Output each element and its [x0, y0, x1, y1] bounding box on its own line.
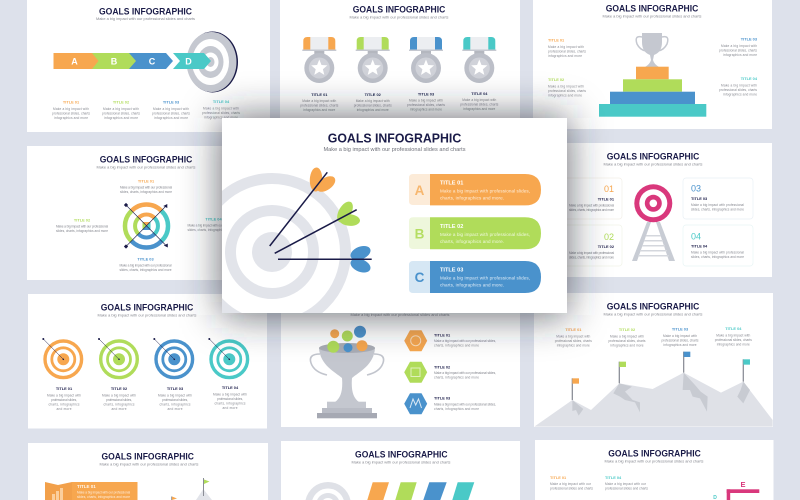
slide subtitle: Make a big impact with our professional slides and charts: [602, 14, 702, 18]
pill C: TITLE 03: [440, 268, 463, 274]
flags on peak: [172, 478, 212, 500]
left text blocks: TITLE 01: [548, 38, 565, 42]
flag text blocks: TITLE 04: [725, 326, 742, 331]
hexagon text blocks: TITLE 01: [434, 332, 451, 338]
heading: GOALS INFOGRAPHIC: [328, 131, 461, 145]
target captions: charts, infographics: [104, 402, 135, 406]
column text blocks: TITLE 01: [63, 100, 80, 104]
medal captions: TITLE 03: [418, 92, 435, 96]
target captions: charts, infographics: [160, 402, 191, 406]
card 04: Make a big impact with professional: [691, 250, 744, 254]
right text blocks: professional slides, charts: [719, 48, 757, 52]
left text blocks: Make a big impact with: [548, 45, 584, 49]
target captions: professional slides,: [51, 398, 77, 402]
flag text blocks: infographics and more: [664, 343, 697, 347]
medal captions: infographics and more: [410, 108, 442, 112]
flag text blocks: Make a big impact with: [556, 334, 591, 338]
column text blocks: [52, 99, 240, 120]
medal captions: TITLE 02: [365, 92, 382, 97]
icon: ladder: [632, 222, 675, 261]
text blocks: TITLE 02: [74, 218, 91, 222]
text block: title 04: Make a big impact with our: [605, 482, 647, 486]
subheading: Make a big impact with our professional slides and charts: [324, 147, 466, 153]
slide title: GOALS INFOGRAPHIC: [101, 302, 193, 314]
arrow ribbon A B C D: D: [185, 56, 192, 66]
medal captions: TITLE 04: [471, 91, 488, 96]
slanted colour bars: [367, 482, 474, 500]
orange banner: slides, charts, infographics and more: [77, 495, 130, 499]
text block: title 01: [550, 475, 593, 490]
pill B: [409, 217, 541, 249]
panel: target and slanted bars slide: [281, 441, 520, 500]
pill C: C: [415, 270, 425, 285]
panel: arrow ribbon and target slide: [27, 0, 270, 132]
slide title: GOALS INFOGRAPHIC: [608, 448, 701, 460]
card 04: 04: [691, 232, 701, 242]
panel: trophy with balls slide: [281, 300, 520, 427]
hexagon text blocks: charts, infographics and more: [434, 376, 479, 380]
column text blocks: professional slides, charts: [102, 112, 140, 116]
card 02: [545, 225, 622, 266]
panel: banner and flag slide: [28, 443, 268, 500]
panel: main goals card: [222, 118, 567, 313]
medal captions: professional slides, charts: [407, 103, 445, 107]
flag text blocks: Make a big impact with: [663, 334, 697, 338]
left text blocks: infographics and more: [548, 54, 582, 58]
pill C: [409, 261, 541, 293]
icon: pink target: [634, 184, 672, 222]
column text blocks: infographics and more: [54, 116, 88, 120]
right text blocks: Make a big impact with: [721, 84, 757, 88]
medal captions: professional slides, charts: [354, 104, 392, 108]
icon: green target: [98, 338, 137, 378]
text block: title 01: Make a big impact with our: [550, 482, 592, 486]
medal 1: [302, 37, 336, 83]
pill A: TITLE 01: [440, 180, 463, 186]
flag text blocks: infographics and more: [717, 342, 750, 346]
orange banner: [45, 482, 138, 500]
target captions: professional slides,: [162, 398, 188, 402]
hexagon text blocks: TITLE 03: [434, 396, 451, 400]
panel: trophy pyramid slide: [533, 0, 772, 129]
slide title: GOALS INFOGRAPHIC: [607, 152, 699, 162]
column text blocks: professional slides, charts: [52, 112, 90, 116]
medal captions: Make a big impact with: [462, 98, 497, 102]
text blocks: Make a big impact with our professional: [120, 186, 172, 190]
arrow ribbon A B C D: C: [149, 56, 156, 66]
text block: title 04: professional slides and charts: [605, 486, 648, 490]
arrow ribbon A B C D: B: [111, 56, 118, 66]
target captions: and more: [56, 407, 72, 411]
target captions: and more: [112, 407, 127, 411]
arrow ribbon A B C D: [54, 53, 211, 69]
left text blocks: Make a big impact with: [548, 84, 584, 88]
medal captions: TITLE 01: [311, 92, 328, 97]
column text blocks: TITLE 02: [113, 100, 130, 104]
card 02: slides, charts, infographics and more: [569, 256, 614, 260]
card 03: 03: [691, 184, 701, 194]
hexagon text blocks: Make a big impact with our professional slides,: [434, 339, 496, 343]
flag text blocks: TITLE 02: [619, 327, 636, 332]
text blocks: slides, charts, infographics and more: [120, 268, 172, 272]
slide subtitle: Make a big impact with our professional slides and charts: [604, 460, 704, 464]
medal captions: Make a big impact with: [409, 98, 443, 102]
slide title: GOALS INFOGRAPHIC: [99, 6, 192, 17]
icon: large trophy: [310, 343, 384, 418]
slide subtitle: Make a big impact with our professional slides and charts: [98, 314, 197, 318]
balls in trophy: [327, 326, 368, 353]
icon: blue target: [153, 338, 193, 378]
medal captions: infographics and more: [303, 108, 336, 112]
text blocks: TITLE 01: [138, 178, 155, 184]
text blocks: Make a big impact with our professional: [56, 224, 108, 228]
card 02: TITLE 02: [598, 244, 615, 249]
text block: title 04: [605, 475, 648, 490]
flag text blocks: infographics and more: [610, 344, 644, 348]
medal captions: [300, 91, 499, 112]
slide title: GOALS INFOGRAPHIC: [100, 154, 192, 166]
flag text blocks: professional slides, charts: [555, 339, 592, 343]
slide title: GOALS INFOGRAPHIC: [355, 450, 448, 460]
pill A: A: [415, 183, 425, 198]
hexagon text blocks: charts, infographics and more: [434, 407, 479, 411]
crossed arrows: [124, 203, 168, 248]
flag text blocks: [555, 326, 752, 348]
medal 2: [356, 37, 390, 83]
medal captions: infographics and more: [357, 108, 389, 112]
panel: four targets slide: [28, 294, 267, 428]
stair letters: E: [740, 480, 746, 489]
arrow: orange: [270, 167, 338, 246]
left text blocks: professional slides, charts: [548, 89, 586, 93]
icon: target with shadow edge: [186, 32, 238, 92]
icon: teal target: [208, 338, 248, 378]
pill A: [409, 174, 541, 205]
medal 3: [409, 37, 443, 83]
flag text blocks: TITLE 03: [672, 326, 689, 332]
icon: large target: [222, 173, 351, 313]
right text blocks: [719, 36, 758, 96]
medal captions: Make a big impact with: [302, 99, 337, 103]
slide title: GOALS INFOGRAPHIC: [101, 452, 194, 462]
right text blocks: infographics and more: [723, 53, 757, 57]
orange banner: TITLE 01: [77, 484, 96, 489]
target captions: Make a big impact with: [47, 394, 81, 398]
text blocks: TITLE 04: [205, 216, 222, 222]
target captions: [47, 385, 247, 411]
slide subtitle: Make a big impact with our professional slides and charts: [604, 312, 703, 316]
slide subtitle: Make a big impact with our professional slides and charts: [100, 462, 199, 466]
medal captions: professional slides, charts: [460, 102, 499, 106]
flag text blocks: Make a big impact with: [610, 334, 644, 338]
column text blocks: infographics and more: [154, 116, 188, 120]
arrow: blue: [278, 243, 373, 275]
right text blocks: infographics and more: [723, 92, 757, 96]
column text blocks: TITLE 03: [163, 100, 180, 104]
left text blocks: professional slides, charts: [548, 50, 586, 54]
card 01: TITLE 01: [598, 196, 615, 202]
target captions: professional slides,: [106, 398, 132, 402]
mountains and flags: [534, 352, 773, 427]
icon: blue hexagon: [404, 393, 427, 414]
column text blocks: professional slides, charts: [152, 112, 190, 116]
column text blocks: infographics and more: [104, 116, 138, 120]
pyramid steps: [599, 67, 706, 117]
text blocks: slides, charts, infographics and more: [188, 228, 240, 232]
stair letters: [713, 480, 759, 500]
panel: crossed arrows target slide: [27, 146, 267, 280]
card 04: slides, charts, infographics and more: [691, 255, 744, 259]
target captions: Make a big impact with: [158, 394, 192, 398]
hexagon text blocks: [434, 332, 496, 411]
arrow: green: [275, 199, 360, 253]
medal captions: professional slides, charts: [300, 104, 339, 108]
flag text blocks: Make a big impact with: [716, 334, 751, 338]
text block: title 01: professional slides and charts: [550, 486, 593, 490]
target captions: Make a big impact with: [213, 392, 247, 396]
target captions: and more: [222, 406, 238, 410]
text block: title 01: TITLE 01: [550, 475, 567, 480]
pill A: charts, infographics and more.: [440, 196, 504, 200]
target captions: TITLE 03: [167, 386, 184, 391]
slide subtitle: Make a big impact with our professional slides and charts: [604, 162, 703, 166]
target captions: Make a big impact with: [102, 394, 136, 398]
hexagon text blocks: Make a big impact with our professional slides,: [434, 371, 496, 375]
orange banner: Make a big impact with our professional: [77, 490, 130, 494]
centre card shadow: [222, 118, 567, 315]
card 01: Make a big impact with professional: [569, 204, 614, 208]
column text blocks: infographics and more: [204, 116, 238, 120]
flag text blocks: professional slides, charts: [662, 338, 699, 342]
icon: green hexagon: [404, 362, 427, 383]
slide subtitle: Make a big impact with our professional slides and charts: [350, 313, 450, 317]
icon: orange hexagon: [404, 330, 427, 351]
flag text blocks: infographics and more: [557, 344, 590, 348]
card 04: TITLE 04: [691, 244, 708, 248]
text blocks: slides, charts, infographics and more: [120, 190, 172, 194]
card 03: slides, charts, infographics and more: [691, 208, 744, 212]
slide subtitle: Make a big impact with our professional slides and charts: [96, 17, 195, 21]
text blocks: Make a big impact with our professional: [188, 224, 240, 228]
card 03: Make a big impact with professional: [691, 203, 744, 207]
hexagon text blocks: charts, infographics and more: [434, 344, 479, 348]
column text blocks: professional slides, charts: [202, 111, 240, 115]
column text blocks: Make a big impact with: [53, 107, 89, 111]
hexagon text blocks: Make a big impact with our professional slides,: [434, 402, 496, 406]
target captions: TITLE 01: [56, 386, 73, 391]
slide subtitle: Make a big impact with our professional slides and charts: [350, 16, 449, 20]
right text blocks: TITLE 03: [741, 36, 758, 42]
icon: four colour target: [125, 204, 168, 248]
flag text blocks: professional slides, charts: [608, 339, 646, 343]
slide subtitle: Make a big impact with our professional slides and charts: [96, 165, 196, 169]
target captions: and more: [168, 407, 183, 411]
target captions: TITLE 04: [222, 385, 239, 390]
card 02: 02: [604, 232, 614, 242]
left text blocks: infographics and more: [548, 94, 582, 98]
panel: medals slide: [280, 0, 520, 119]
panel: ladder to target slide: [533, 143, 772, 277]
text blocks: slides, charts, infographics and more: [56, 229, 108, 233]
pill B: TITLE 02: [440, 224, 463, 230]
right text blocks: professional slides, charts: [719, 88, 757, 92]
arrow ribbon A B C D: A: [71, 56, 78, 66]
text blocks: Make a big impact with our professional: [120, 264, 172, 268]
card 01: slides, charts, infographics and more: [569, 208, 614, 212]
card 04: [683, 225, 753, 266]
panel: letter stairs slide: [535, 440, 774, 500]
slide title: GOALS INFOGRAPHIC: [606, 4, 698, 14]
right text blocks: TITLE 04: [741, 76, 758, 81]
slide title: GOALS INFOGRAPHIC: [607, 302, 699, 312]
target captions: charts, infographics: [48, 402, 80, 406]
column text blocks: Make a big impact with: [103, 107, 139, 111]
medal captions: infographics and more: [463, 107, 496, 111]
panel: mountain flags slide: [534, 293, 773, 427]
medal 4: [462, 37, 496, 83]
flag text blocks: professional slides, charts: [715, 338, 752, 342]
pill A: Make a big impact with professional slides,: [440, 188, 530, 194]
text block: title 04: TITLE 04: [605, 475, 622, 480]
right text blocks: Make a big impact with: [721, 44, 757, 48]
pill C: charts, infographics and more.: [440, 282, 504, 288]
left text blocks: TITLE 02: [548, 77, 565, 82]
slide title: GOALS INFOGRAPHIC: [353, 4, 445, 16]
card 03: TITLE 03: [691, 196, 708, 201]
column text blocks: TITLE 04: [213, 99, 230, 104]
card 01: [545, 178, 622, 219]
text blocks: [56, 178, 240, 272]
pill B: charts, infographics and more.: [440, 239, 504, 244]
icon: trophy: [636, 33, 668, 67]
icon: orange target: [42, 338, 82, 378]
column text blocks: Make a big impact with: [203, 106, 239, 110]
card 01: 01: [604, 184, 614, 194]
hexagon text blocks: TITLE 02: [434, 364, 451, 370]
target captions: charts, infographics: [214, 402, 246, 406]
icon: grey target: [306, 482, 350, 500]
slide subtitle: Make a big impact with our professional slides and charts: [352, 460, 451, 464]
medal captions: Make a big impact with: [356, 99, 390, 103]
pill B: Make a big impact with professional slides,: [440, 232, 530, 237]
pill C: Make a big impact with professional slides,: [440, 276, 530, 280]
pill B: B: [415, 226, 425, 242]
target captions: professional slides,: [217, 397, 243, 401]
column text blocks: Make a big impact with: [153, 107, 189, 111]
flag text blocks: TITLE 01: [565, 327, 582, 332]
target captions: TITLE 02: [111, 386, 128, 391]
card 02: Make a big impact with professional: [569, 251, 614, 255]
left text blocks: [548, 38, 586, 98]
text blocks: TITLE 03: [137, 256, 154, 262]
card 03: [683, 178, 753, 219]
